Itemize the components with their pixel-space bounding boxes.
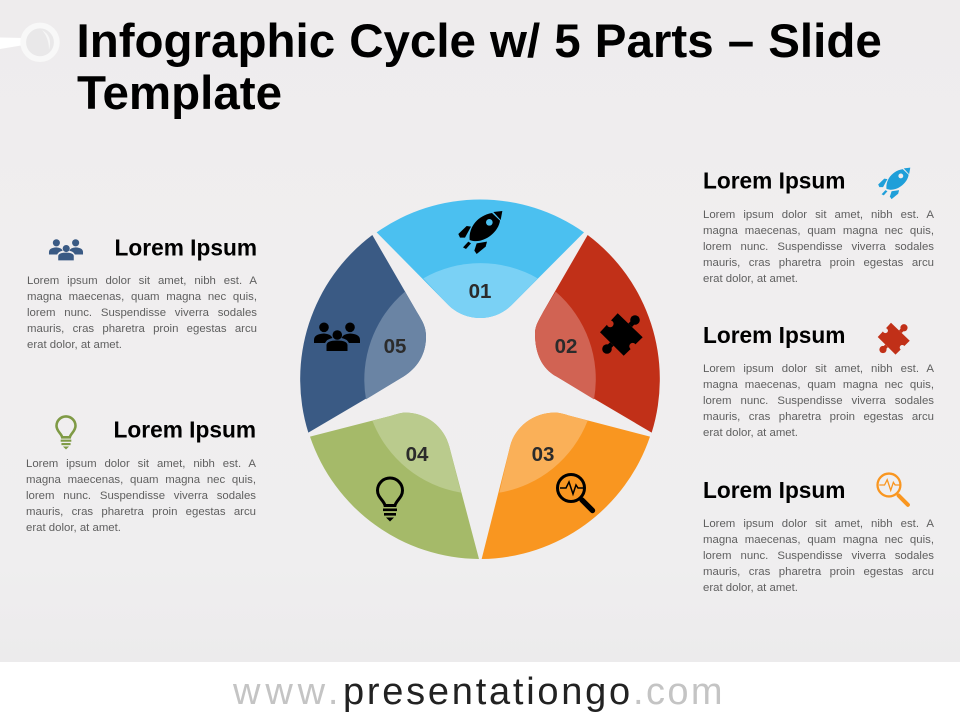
text block: right 1: erat dolor, at amet. (703, 273, 798, 285)
text block: right 3: magna maecenas, quam magna nec quis, (703, 534, 934, 546)
text block: left 1: magna maecenas, quam magna nec quis, (27, 291, 257, 303)
segment 05 (300, 235, 426, 433)
icon: puzzle black (600, 313, 643, 356)
text block: left 1: Lorem ipsum dolor sit amet, nibh est. A (27, 275, 257, 287)
text block: right 2: erat dolor, at amet. (703, 427, 798, 439)
text block: right 1: Lorem ipsum dolor sit amet, nibh est. A (703, 209, 934, 221)
heading: left 2: Lorem Ipsum (114, 416, 256, 442)
segment numbers: 01 (469, 280, 491, 303)
segment numbers (384, 280, 577, 466)
text block: left 2: Lorem ipsum dolor sit amet, nibh est. A (26, 458, 256, 470)
segment 01 (377, 199, 584, 318)
text block: right 1: lorem nunc. Suspendisse viverra sodales (703, 241, 934, 253)
footer band: www. (232, 671, 343, 713)
text block: right 2: Lorem ipsum dolor sit amet, nibh est. A (703, 363, 934, 375)
heading: right 1: Lorem Ipsum (703, 168, 845, 194)
text block: left 2: mauris, cras pharetra proin egestas arcu (26, 506, 256, 518)
icon: people black (314, 322, 360, 351)
segment numbers: 02 (555, 335, 577, 358)
text block: right 2 (703, 363, 934, 439)
text block: right 3: lorem nunc. Suspendisse viverra sodales (703, 550, 934, 562)
text block: left 2 (26, 458, 256, 534)
text block: right 2: mauris, cras pharetra proin egestas arcu (703, 411, 934, 423)
icon: light bulb olive (56, 416, 76, 449)
segment numbers: 04 (406, 443, 429, 466)
text block: right 1 (703, 209, 934, 285)
text block: left 2: erat dolor, at amet. (26, 522, 121, 534)
heading: left 1: Lorem Ipsum (115, 234, 257, 260)
text block: left 2: lorem nunc. Suspendisse viverra sodales (26, 490, 256, 502)
text block: right 3: erat dolor, at amet. (703, 582, 798, 594)
text block: left 1: lorem nunc. Suspendisse viverra sodales (27, 307, 257, 319)
text block: left 1: mauris, cras pharetra proin egestas arcu (27, 323, 257, 335)
heading: right 2: Lorem Ipsum (703, 322, 845, 348)
text block: right 2: magna maecenas, quam magna nec quis, (703, 379, 934, 391)
segment numbers: 05 (384, 335, 406, 358)
segment 03 (482, 413, 650, 559)
segment numbers: 03 (532, 443, 554, 466)
footer band: .com (633, 671, 725, 713)
heading: right 3: Lorem Ipsum (703, 477, 845, 503)
text block: left 1: erat dolor, at amet. (27, 339, 122, 351)
icon: magnifier orange (878, 474, 908, 505)
footer band: presentationgo (343, 671, 633, 713)
cycle chart (300, 199, 660, 559)
title (76, 15, 882, 120)
icon: rocket blue (878, 168, 910, 199)
segment 04 (310, 413, 479, 559)
icon: light bulb black (378, 478, 402, 522)
text block: right 2: lorem nunc. Suspendisse viverra sodales (703, 395, 934, 407)
segment 02 (535, 235, 660, 433)
icon: puzzle red (878, 323, 910, 355)
text block: left 2: magna maecenas, quam magna nec quis, (26, 474, 256, 486)
text block: right 3: mauris, cras pharetra proin egestas arcu (703, 566, 934, 578)
text block: left 1 (27, 275, 257, 351)
text block: right 3: Lorem ipsum dolor sit amet, nibh est. A (703, 518, 934, 530)
footer band (0, 662, 960, 720)
text block: right 1: mauris, cras pharetra proin egestas arcu (703, 257, 934, 269)
icon: magnifier black (558, 474, 592, 510)
title: Template (77, 67, 282, 120)
icon: people navy (49, 239, 83, 260)
corner logo ring (0, 26, 57, 59)
text block: right 1: magna maecenas, quam magna nec quis, (703, 225, 934, 237)
title: Infographic Cycle w/ 5 Parts – Slide (76, 15, 882, 68)
text block: right 3 (703, 518, 934, 594)
icon: rocket black (458, 211, 502, 254)
